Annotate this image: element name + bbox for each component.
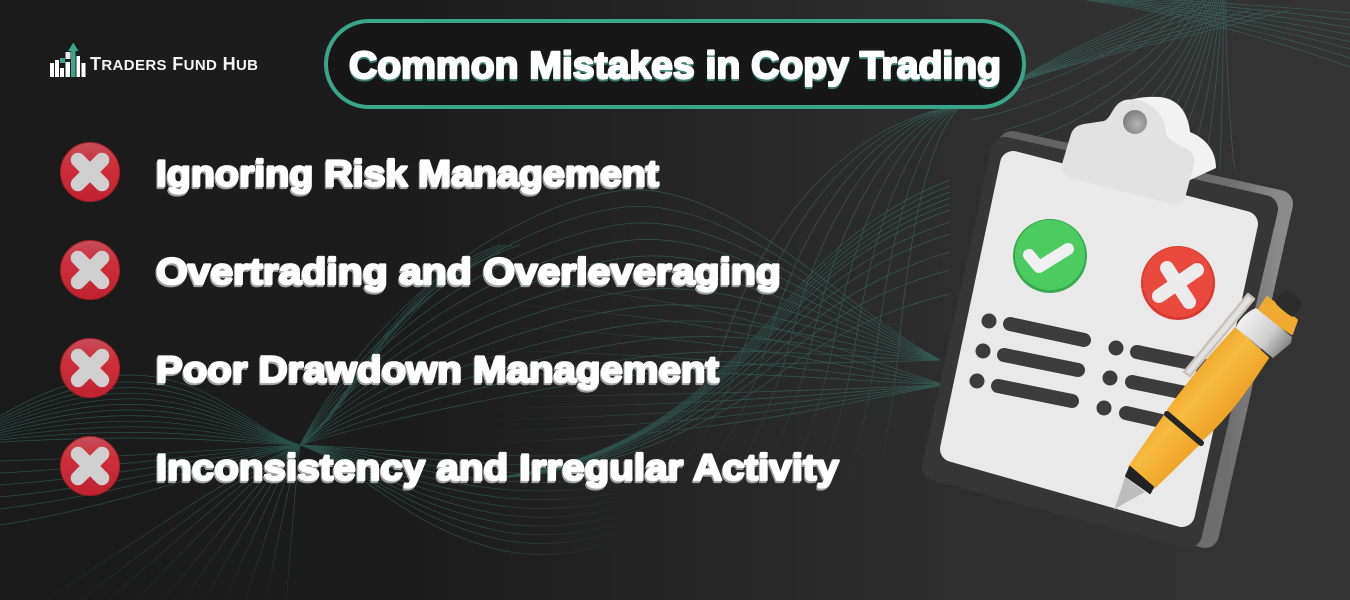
text: Inconsistency and Irregular Activity: Inconsistency and Irregular Activity — [156, 447, 839, 488]
clip hole — [1123, 110, 1147, 134]
list item 2 — [60, 240, 781, 300]
list item 4 — [60, 436, 839, 496]
pen end button — [1275, 290, 1302, 317]
text: Ignoring Risk Management: Ignoring Risk Management — [156, 153, 659, 194]
logo icon: rising bars with arrow — [50, 42, 86, 77]
list item 3 — [60, 338, 719, 398]
title pill — [326, 21, 1024, 107]
icon: red cross — [60, 240, 120, 300]
pen collar — [1236, 308, 1292, 358]
pen — [1114, 290, 1302, 510]
pen cap — [1257, 297, 1297, 334]
pen dark ring — [1167, 414, 1201, 443]
clipboard illustration — [936, 97, 1302, 534]
clipboard board front — [936, 151, 1264, 534]
pen black collar — [1126, 467, 1153, 493]
logo: Traders Fund Hub — [50, 42, 258, 77]
icon: green check — [1013, 219, 1087, 293]
icon: red cross — [1141, 246, 1215, 320]
title text: Common Mistakes in Copy Trading — [349, 45, 1001, 87]
pill outline — [326, 21, 1024, 107]
text: Poor Drawdown Management: Poor Drawdown Management — [156, 349, 719, 390]
icon: red cross — [60, 436, 120, 496]
list item 1 — [60, 142, 659, 202]
pen clip — [1184, 294, 1254, 376]
left checklist lines — [970, 314, 1084, 401]
logo wordmark: TRADERS FUND HUB — [90, 54, 258, 74]
icon: red cross — [60, 338, 120, 398]
text: Overtrading and Overleveraging: Overtrading and Overleveraging — [156, 251, 781, 292]
metal clip — [1061, 97, 1216, 205]
clipboard board side — [942, 145, 1279, 534]
right checklist lines — [1096, 340, 1205, 423]
pen upper barrel — [1168, 328, 1268, 440]
paper sheet — [953, 164, 1245, 514]
pen lower barrel — [1129, 415, 1198, 488]
icon: red cross — [60, 142, 120, 202]
pen tip — [1114, 477, 1145, 510]
